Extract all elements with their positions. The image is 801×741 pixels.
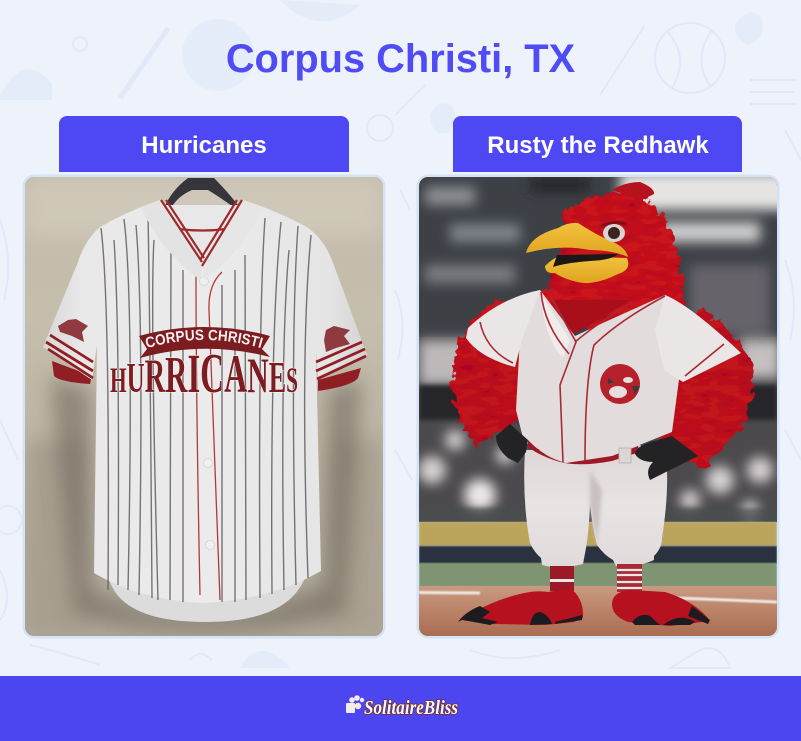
sleeve logo right (324, 326, 350, 352)
red cuffs (52, 361, 92, 384)
tab: Rusty the Redhawk: Rusty the Redhawk (487, 132, 709, 159)
eye (601, 222, 626, 242)
footer band (0, 676, 801, 741)
sleeve logo left (58, 319, 88, 342)
socks (550, 564, 642, 592)
jersey piping (480, 292, 724, 462)
shirt body (43, 200, 367, 603)
sleeve right (655, 295, 741, 382)
red undershirt (555, 300, 630, 336)
head (536, 193, 684, 335)
glove right (635, 436, 698, 480)
pants shading (590, 470, 602, 545)
sleeve left (466, 290, 540, 367)
logo icon: cards and dice (346, 695, 364, 713)
collar flaps (142, 206, 200, 280)
footer logo: SolitaireBliss (364, 697, 458, 719)
tab: Rusty the Redhawk (453, 116, 742, 172)
beak (526, 223, 628, 283)
footer logo (346, 695, 458, 719)
shirt tail (110, 580, 304, 622)
chest banner: CORPUS CHRISTI (146, 330, 263, 348)
jersey shadow (50, 375, 362, 630)
inner collar (165, 205, 240, 263)
feathered arm left (452, 298, 530, 447)
sleeve stripes (46, 335, 366, 379)
belt (528, 440, 640, 464)
crest (612, 182, 654, 199)
pants (524, 445, 667, 567)
glove left (496, 424, 528, 463)
title: Corpus Christi, TX (226, 37, 576, 81)
placket (196, 270, 200, 595)
chest logo (600, 364, 640, 404)
tab: Hurricanes: Hurricanes (141, 132, 267, 159)
foot right (612, 590, 710, 626)
panel: jersey photo (22, 174, 386, 638)
mascot (452, 182, 754, 626)
hanger (166, 178, 238, 205)
foot left (458, 588, 583, 625)
jersey body (466, 290, 741, 463)
buttons (200, 276, 214, 550)
pinstripes (101, 213, 311, 602)
feathered arm right (660, 310, 754, 470)
stadium background (418, 172, 790, 638)
chest wordmark: HURRICANES (110, 343, 298, 405)
tab: Hurricanes (59, 116, 349, 172)
panel: mascot photo (418, 172, 790, 638)
jersey (43, 199, 367, 622)
